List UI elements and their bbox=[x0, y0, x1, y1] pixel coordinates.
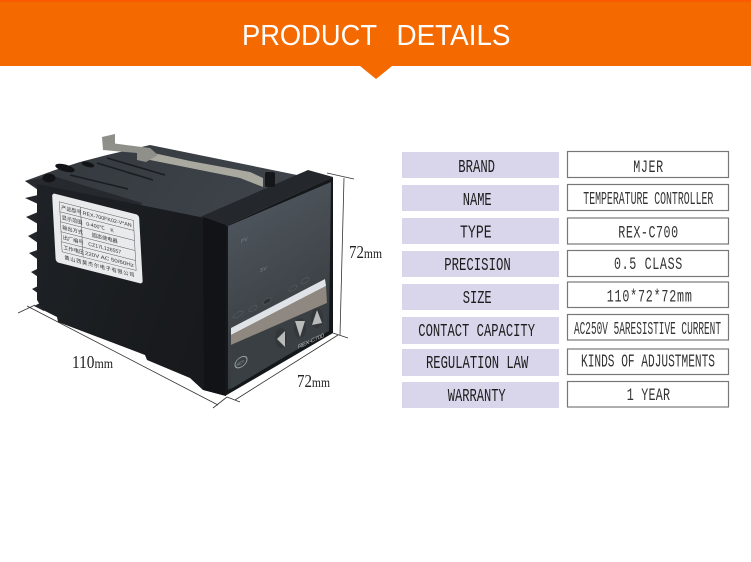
row: type bbox=[402, 218, 728, 244]
row: size: 110*72*72mm bbox=[607, 286, 692, 308]
row: contact capacity: CONTACT CAPACITY bbox=[418, 322, 535, 342]
row: warranty: 1 YEAR bbox=[627, 385, 670, 406]
row: precision: 0.5 CLASS bbox=[614, 254, 682, 275]
header banner bbox=[0, 0, 751, 79]
bezel top bbox=[200, 170, 333, 226]
title: DETAILS bbox=[396, 20, 510, 52]
row: warranty bbox=[402, 382, 728, 408]
row: type: REX-C700 bbox=[618, 222, 678, 243]
product label sticker: 0-400℃ K bbox=[86, 220, 115, 234]
row: precision: PRECISION bbox=[444, 256, 511, 276]
row: name: NAME bbox=[463, 191, 492, 211]
dimension label: width: 72mm bbox=[297, 371, 330, 391]
front glass panel bbox=[228, 182, 331, 390]
row: name bbox=[402, 184, 728, 211]
dimension label: length: 110mm bbox=[72, 352, 113, 372]
white stripe and display band bbox=[231, 279, 326, 335]
row: regulation law: REGULATION LAW bbox=[426, 354, 528, 374]
row: regulation law bbox=[402, 349, 728, 376]
front panel markings and keys: SET bbox=[237, 359, 245, 367]
row: brand bbox=[402, 152, 728, 178]
product label sticker: 220V AC 50/60Hz bbox=[85, 251, 134, 269]
title: PRODUCT bbox=[242, 20, 377, 52]
front panel markings and keys: PV bbox=[241, 236, 248, 245]
row: precision bbox=[402, 250, 728, 277]
product photo: temperature controller bbox=[25, 134, 333, 396]
front frame bbox=[225, 177, 333, 396]
product label sticker: 固态继电器 bbox=[92, 231, 119, 245]
product label sticker: 显示范围 bbox=[61, 213, 83, 226]
product label sticker: 输出方式 bbox=[62, 223, 84, 237]
title bbox=[242, 20, 510, 52]
product label sticker: 黄山西莫杰尔电子有限公司 bbox=[64, 253, 135, 279]
row: warranty: WARRANTY bbox=[448, 387, 506, 407]
product label sticker: CZ17L126557 bbox=[88, 242, 121, 256]
row: brand: MJER bbox=[633, 157, 663, 178]
cooling fins bbox=[25, 195, 44, 311]
metal clip bbox=[102, 134, 275, 187]
row: size: SIZE bbox=[463, 289, 492, 309]
row: contact capacity bbox=[402, 314, 728, 344]
row: type: TYPE bbox=[460, 224, 492, 244]
product label sticker bbox=[52, 193, 143, 284]
front panel markings and keys: SV bbox=[260, 265, 267, 274]
product label sticker: REX-700FK02-V*AN bbox=[83, 211, 132, 229]
dimension lines bbox=[18, 173, 354, 408]
top grooves bbox=[70, 158, 165, 189]
side face bbox=[37, 184, 226, 396]
product label sticker: 出厂编号 bbox=[63, 233, 84, 246]
product label sticker: 产品型号 bbox=[61, 203, 82, 216]
spec table bbox=[402, 152, 728, 408]
row: size bbox=[402, 282, 728, 310]
row: brand: BRAND bbox=[458, 158, 495, 178]
top face bbox=[25, 145, 333, 226]
front panel markings and keys: REX-C700 bbox=[298, 332, 324, 351]
front panel markings and keys bbox=[233, 201, 324, 381]
product label sticker: 工作电压 bbox=[63, 243, 85, 257]
dimension label: height: 72mm bbox=[349, 242, 382, 262]
